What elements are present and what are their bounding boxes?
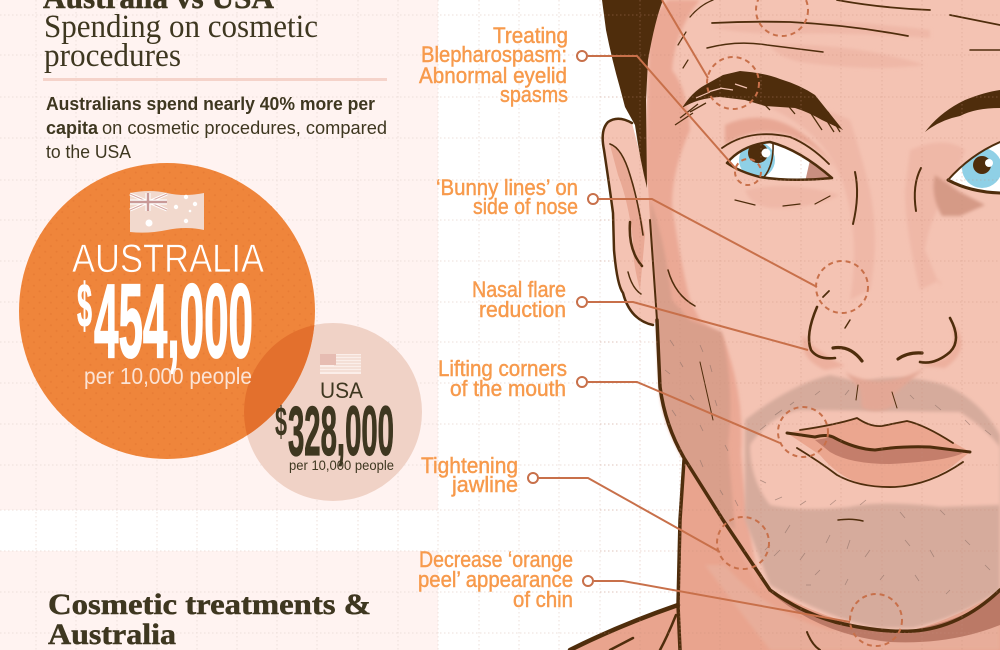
hair [602,0,663,188]
callout: orange peel chin: of chin [513,587,573,612]
callout: treating blepharospasm: spasms [500,82,568,107]
illustration: man's face [570,0,1000,650]
callout: tightening jawline [421,453,769,569]
callout: lifting corners of the mouth [438,356,828,457]
stat: USA [275,378,394,473]
stat: Australia: per 10,000 people [84,363,252,389]
circle: USA [244,323,422,501]
callout: forehead line and zones [662,0,808,109]
left eyebrow [675,71,843,132]
callout: treating blepharospasm: Abnormal eyelid [419,63,567,88]
mouth area skin [750,410,1000,509]
callout: orange peel chin: peel’ appearance [418,567,573,592]
callout: tightening jawline: Tightening [421,453,518,478]
icon: Australian flag [130,191,204,233]
side of face shading [645,0,760,590]
icon: USA flag [320,354,361,374]
callout: bunny lines [436,175,868,313]
text block: per capita comparison: to the USA [46,142,131,162]
forehead shading [712,21,965,300]
callout: nasal flare: reduction [479,297,566,322]
panel: spending background [0,0,438,510]
text block: per capita comparison: Australians spend nearly 40% more per [46,94,375,114]
stat: Australia: AUSTRALIA [72,237,264,281]
right eyebrow [925,90,1000,132]
forehead lines [668,0,1000,306]
lips [787,418,970,487]
ear [603,119,657,325]
philtrum and nose shadow [845,368,925,411]
callout: orange peel chin [418,547,902,646]
text: 454,000 [94,263,253,380]
callout: bunny lines: ‘Bunny lines’ on [436,175,578,200]
callout: tightening jawline: jawline [451,472,518,497]
stubble [640,242,991,594]
stat: Australia: $ [77,272,92,341]
subheading: spending on cosmetic procedures: procedures [44,38,181,74]
jaw and neck outline [570,320,1000,650]
stat: Australia [72,237,264,389]
heading: Cosmetic treatments & Australia: Cosmetic treatments & [48,588,371,621]
grid over face [600,0,1000,650]
nose lines [809,291,956,363]
circle: Australia [19,163,315,459]
stat: USA: USA [320,378,363,403]
text block: per capita comparison [46,94,387,162]
left eye [728,143,829,178]
callout: lifting corners of the mouth: Lifting corners [438,356,567,381]
panel: cosmetic treatments background [0,551,438,650]
callout: treating blepharospasm: Treating [493,23,568,48]
callout: nasal flare [472,277,808,350]
text: 328,000 [288,392,394,470]
text block: per capita comparison: capita [46,118,99,138]
callout: treating blepharospasm: Blepharospasm: [421,42,567,67]
heading: Cosmetic treatments & Australia [48,588,371,650]
callout: lifting corners of the mouth: of the mouth [450,376,566,401]
stat: USA: $ [275,398,287,445]
callout: nasal flare: Nasal flare [472,277,566,302]
neck and shoulder [570,455,1000,650]
callout: bunny lines: side of nose [473,194,578,219]
text block: per capita comparison: on cosmetic procedures, compared [102,118,387,138]
lip outlines [787,385,970,521]
subheading: spending on cosmetic procedures: Spending on cosmetic [44,9,318,45]
mustache and beard [745,375,1000,628]
stat: USA: per 10,000 people [289,458,394,473]
callout: treating blepharospasm [419,23,761,185]
subheading: spending on cosmetic procedures [44,9,318,74]
face base [645,0,1000,632]
callout: orange peel chin: Decrease ‘orange [419,547,573,572]
right eye [948,142,1000,193]
